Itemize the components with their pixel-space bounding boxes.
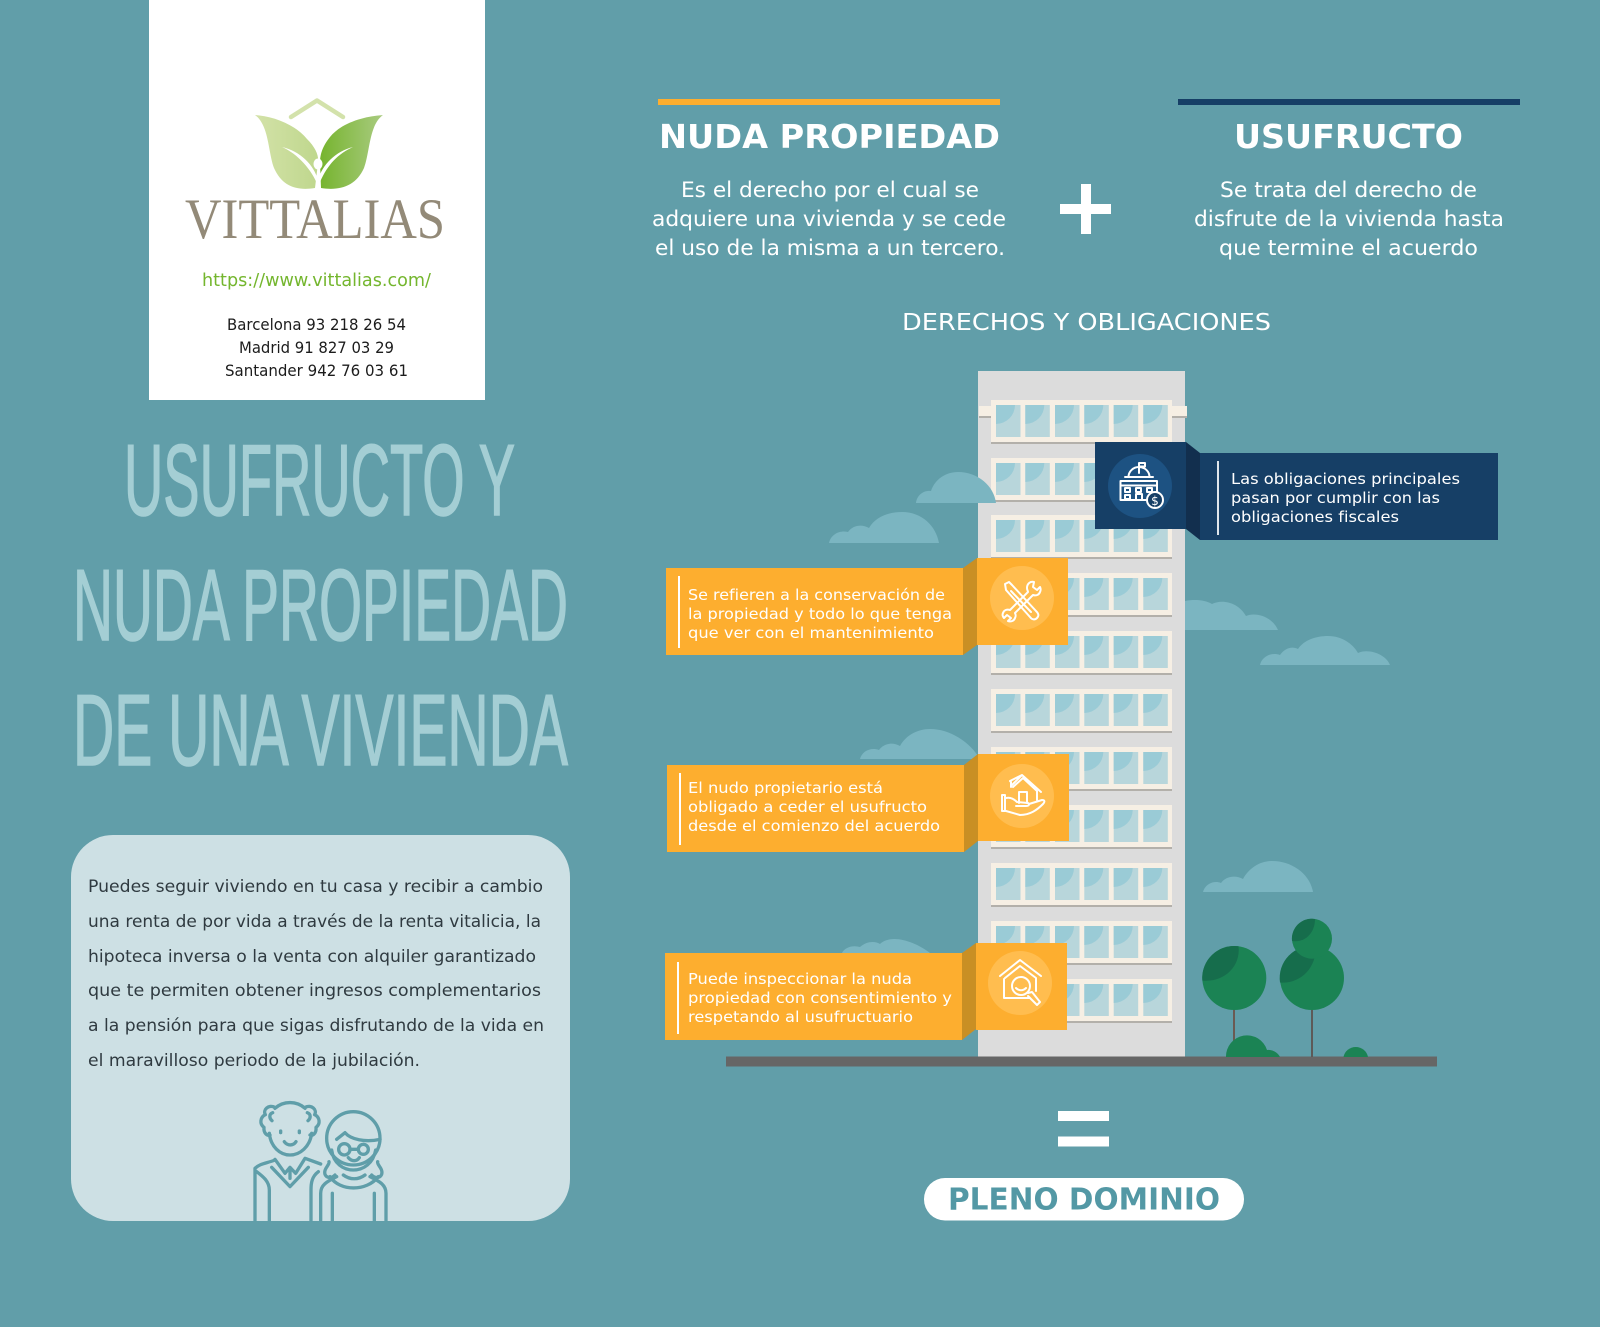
- icon: wrench and screwdriver: [1003, 582, 1041, 621]
- result badge: pleno dominio: PLENO DOMINIO: [948, 1182, 1220, 1218]
- text block: nuda propiedad definition: el uso de la misma a un tercero.: [655, 236, 1005, 261]
- section heading: derechos y obligaciones: DERECHOS Y OBLIGACIONES: [902, 310, 1271, 336]
- callout: inspecting the property: [665, 943, 1067, 1040]
- text block: nuda propiedad definition: [652, 178, 1006, 261]
- callout text: obligado a ceder el usufructo: [688, 798, 927, 816]
- text block: usufructo definition: Se trata del derecho de: [1220, 178, 1477, 203]
- building: [978, 371, 1187, 1057]
- callout: fiscal obligations: [1095, 442, 1498, 540]
- text block: nuda propiedad definition: adquiere una vivienda y se cede: [652, 207, 1006, 232]
- icon: Vittalias leaf logo: [255, 100, 383, 189]
- callout text: desde el comienzo del acuerdo: [688, 817, 940, 835]
- contact phone numbers: Madrid 91 827 03 29: [239, 338, 394, 357]
- note text: [88, 877, 544, 1071]
- callout text: que ver con el mantenimiento: [688, 624, 934, 642]
- title: NUDA PROPIEDAD: [73, 550, 568, 662]
- panel: retirement income note: [71, 835, 570, 1221]
- callout text: propiedad con consentimiento y: [688, 989, 952, 1007]
- icon: government building with dollar: [1120, 463, 1163, 508]
- note text: Puedes seguir viviendo en tu casa y recibir a cambio: [88, 877, 543, 897]
- callout: ceding the usufruct: [667, 754, 1069, 852]
- website link: https://www.vittalias.com/: [202, 270, 432, 291]
- note text: hipoteca inversa o la venta con alquiler garantizado: [88, 947, 536, 967]
- icon: house with magnifying glass: [1000, 960, 1041, 1005]
- trees and bushes: [1202, 919, 1368, 1057]
- callout text: [1231, 470, 1460, 526]
- note text: que te permiten obtener ingresos complementarios: [88, 981, 541, 1001]
- callout text: [688, 970, 952, 1026]
- callout: maintenance: [666, 558, 1068, 655]
- contact phone numbers: Barcelona 93 218 26 54: [227, 315, 406, 334]
- title: [73, 425, 568, 787]
- icon: elderly couple: [255, 1103, 386, 1221]
- heading: usufructo: [1178, 99, 1520, 156]
- logo wordmark: VITTALIAS: [185, 188, 445, 251]
- clouds: [829, 512, 980, 953]
- contact phone numbers: [225, 315, 408, 380]
- text block: nuda propiedad definition: Es el derecho por el cual se: [681, 178, 979, 203]
- callout text: la propiedad y todo lo que tenga: [688, 605, 952, 623]
- icon: equals sign: [1058, 1111, 1109, 1146]
- dollar glyph: $: [1151, 494, 1159, 508]
- callout text: respetando al usufructuario: [688, 1008, 913, 1026]
- text block: usufructo definition: [1194, 178, 1504, 261]
- note text: el maravilloso periodo de la jubilación.: [88, 1051, 420, 1071]
- callout text: Puede inspeccionar la nuda: [688, 970, 912, 988]
- icon: house on a hand: [1002, 775, 1044, 815]
- contact phone numbers: Santander 942 76 03 61: [225, 361, 408, 380]
- heading: nuda propiedad: NUDA PROPIEDAD: [659, 117, 1000, 156]
- callout text: Se refieren a la conservación de: [688, 586, 945, 604]
- heading: nuda propiedad: [658, 99, 1000, 156]
- callout text: obligaciones fiscales: [1231, 508, 1399, 526]
- callout text: [688, 779, 940, 835]
- panel: logo and contact card: [149, 0, 485, 400]
- title: USUFRUCTO Y: [124, 425, 515, 537]
- title: DE UNA VIVIENDA: [73, 675, 568, 787]
- ground line: [726, 1056, 1437, 1066]
- callout text: El nudo propietario está: [688, 779, 883, 797]
- note text: una renta de por vida a través de la renta vitalicia, la: [88, 912, 541, 932]
- icon: plus sign: [1060, 184, 1111, 234]
- callout text: pasan por cumplir con las: [1231, 489, 1440, 507]
- callout text: Las obligaciones principales: [1231, 470, 1460, 488]
- note text: a la pensión para que sigas disfrutando de la vida en: [88, 1016, 544, 1036]
- text block: usufructo definition: que termine el acuerdo: [1219, 236, 1478, 261]
- callout text: [688, 586, 952, 642]
- clouds in front of and around the building: [916, 472, 1390, 892]
- heading: usufructo: USUFRUCTO: [1234, 117, 1463, 156]
- text block: usufructo definition: disfrute de la vivienda hasta: [1194, 207, 1504, 232]
